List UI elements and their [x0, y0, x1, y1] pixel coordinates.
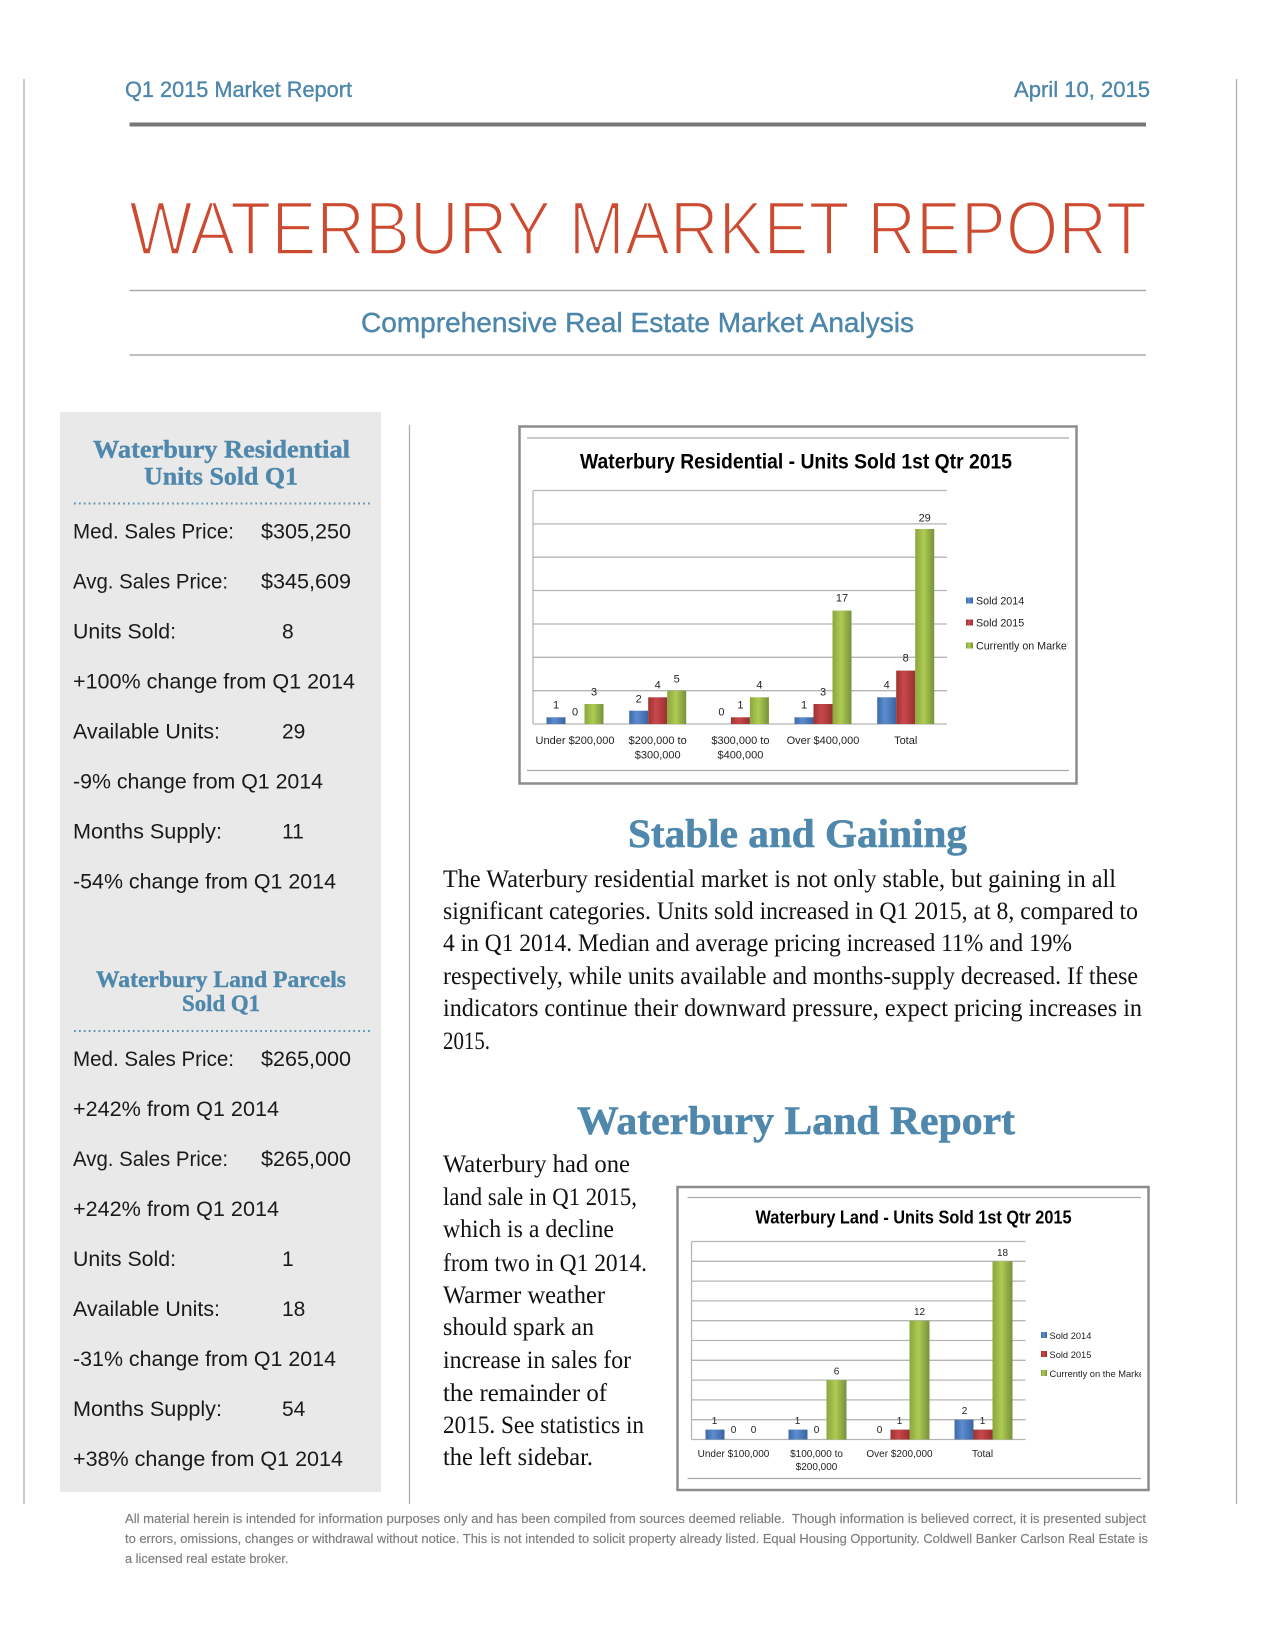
data labels: 0	[718, 706, 724, 718]
residential statistics list: 8	[282, 620, 294, 644]
header: report name: Q1 2015 Market Report	[125, 77, 352, 102]
category labels	[536, 735, 917, 762]
data labels: 3	[820, 686, 826, 698]
data labels: 0	[751, 1425, 757, 1436]
data labels: 12	[914, 1307, 925, 1318]
data labels: 1	[712, 1416, 718, 1427]
data labels: 8	[903, 652, 909, 664]
residential statistics list: 11	[282, 820, 304, 844]
legend	[1041, 1331, 1147, 1379]
data labels: 18	[997, 1248, 1008, 1259]
category labels: $200,000	[796, 1462, 838, 1473]
residential statistics list: +100% change from Q1 2014	[73, 670, 355, 694]
category labels: Over $400,000	[787, 735, 859, 747]
legend: Currently on Market	[976, 640, 1070, 652]
body text: residential market: significant categories. Units sold increased in Q1 2015, at 8, compared to	[443, 898, 1138, 925]
residential statistics list: -54% change from Q1 2014	[73, 870, 336, 894]
body text: land report: should spark an	[443, 1314, 594, 1341]
land statistics list	[73, 1048, 351, 1471]
heading: residential units sold: Units Sold Q1	[144, 464, 298, 490]
data labels: 4	[655, 680, 661, 692]
category labels: Over $200,000	[866, 1449, 933, 1460]
body text: residential market: 2015.	[443, 1028, 490, 1055]
data labels: 1	[801, 700, 807, 712]
category labels: $200,000 to	[629, 735, 687, 747]
data labels: 0	[877, 1425, 883, 1436]
data labels: 4	[756, 680, 762, 692]
category labels: Under $100,000	[698, 1449, 770, 1460]
heading: stable and gaining: Stable and Gaining	[628, 811, 967, 856]
category labels: $100,000 to	[790, 1449, 843, 1460]
category labels	[698, 1449, 993, 1473]
body text: residential market: indicators continue their downward pressure, expect pricing increases in	[443, 995, 1142, 1022]
heading: waterbury land report: Waterbury Land Report	[577, 1098, 1016, 1143]
residential statistics list: Available Units:	[73, 720, 220, 744]
land statistics list: 54	[282, 1398, 306, 1421]
legend: Currently on the Market	[1050, 1369, 1147, 1379]
category labels: Under $200,000	[536, 735, 614, 747]
body text: land report: which is a decline	[443, 1216, 614, 1243]
body text: land report: the left sidebar.	[443, 1444, 593, 1471]
legend: Sold 2014	[1050, 1331, 1091, 1341]
data labels: 4	[884, 680, 890, 692]
heading: residential units sold	[93, 436, 350, 490]
data labels	[553, 512, 931, 718]
heading: land parcels sold: Sold Q1	[182, 991, 260, 1017]
land statistics list: $265,000	[261, 1148, 351, 1171]
chart: residential units sold	[520, 426, 1076, 784]
residential statistics list	[73, 520, 355, 894]
chart title: Waterbury Residential - Units Sold 1st Qtr 2015	[580, 450, 1012, 474]
legend: Sold 2015	[976, 618, 1024, 630]
body text: land report: the remainder of	[443, 1380, 608, 1407]
body text: residential market: The Waterbury residential market is not only stable, but gaining in all	[443, 866, 1116, 893]
land statistics list: Avg. Sales Price:	[73, 1148, 228, 1171]
body text: land report: land sale in Q1 2015,	[443, 1184, 637, 1211]
category labels: Total	[972, 1449, 993, 1460]
panel: sidebar	[60, 412, 381, 1492]
category labels: $300,000 to	[711, 735, 769, 747]
residential statistics list: $305,250	[261, 520, 351, 544]
category labels: Total	[894, 735, 917, 747]
bars	[546, 529, 934, 724]
body text: land report: from two in Q1 2014.	[443, 1250, 647, 1277]
data labels: 2	[962, 1406, 968, 1417]
data labels: 6	[834, 1366, 840, 1378]
footer disclaimer: to errors, omissions, changes or withdrawal without notice. This is not intended to solicit property already listed. Equal Housing Opportunity. Coldwell Banker Carlson Real Estate is	[125, 1532, 1148, 1546]
body text: residential market: respectively, while units available and months-supply decreased. If these	[443, 963, 1138, 990]
legend: Sold 2015	[1050, 1350, 1091, 1360]
land statistics list: Units Sold:	[73, 1248, 176, 1271]
header: date: April 10, 2015	[1014, 77, 1150, 102]
land statistics list: Available Units:	[73, 1298, 220, 1321]
legend: Sold 2014	[976, 596, 1024, 608]
residential statistics list: -9% change from Q1 2014	[73, 770, 323, 794]
residential statistics list: Units Sold:	[73, 620, 176, 644]
page frame right line	[1236, 79, 1238, 1504]
bars	[706, 1261, 1012, 1440]
land statistics list: -31% change from Q1 2014	[73, 1348, 336, 1371]
residential statistics list: Med. Sales Price:	[73, 520, 234, 544]
data labels: 1	[795, 1416, 801, 1427]
data labels: 2	[636, 694, 642, 706]
data labels	[712, 1248, 1008, 1436]
page frame left line	[23, 79, 25, 1504]
body text: land report	[443, 1151, 647, 1471]
chart: land units sold	[678, 1187, 1148, 1490]
data labels: 0	[731, 1425, 737, 1436]
data labels: 5	[674, 674, 680, 686]
land statistics list: $265,000	[261, 1048, 351, 1071]
body text: land report: Warmer weather	[443, 1282, 606, 1309]
heading: residential units sold: Waterbury Residential	[93, 436, 350, 464]
residential statistics list: Avg. Sales Price:	[73, 570, 228, 594]
category labels: $400,000	[717, 750, 763, 762]
title: WATERBURY MARKET REPORT	[129, 186, 1147, 272]
body text: residential market: 4 in Q1 2014. Median and average pricing increased 11% and 19%	[443, 930, 1072, 957]
land statistics list: 1	[282, 1248, 294, 1271]
data labels: 29	[919, 512, 931, 524]
data labels: 3	[591, 686, 597, 698]
data labels: 0	[572, 706, 578, 718]
land statistics list: Months Supply:	[73, 1398, 222, 1421]
land statistics list: +242% from Q1 2014	[73, 1098, 279, 1121]
footer disclaimer	[125, 1512, 1148, 1566]
land statistics list: Med. Sales Price:	[73, 1048, 234, 1071]
data labels: 17	[836, 592, 848, 604]
legend	[966, 596, 1070, 652]
heading: land parcels sold	[96, 967, 346, 1017]
footer disclaimer: a licensed real estate broker.	[125, 1552, 288, 1566]
residential statistics list: Months Supply:	[73, 820, 222, 844]
data labels: 1	[737, 700, 743, 712]
heading: land parcels sold: Waterbury Land Parcels	[96, 967, 346, 993]
body text: land report: increase in sales for	[443, 1347, 632, 1374]
residential statistics list: $345,609	[261, 570, 351, 594]
land statistics list: 18	[282, 1298, 305, 1321]
chart title: Waterbury Land - Units Sold 1st Qtr 2015	[756, 1208, 1072, 1228]
data labels: 1	[980, 1416, 986, 1427]
subtitle: Comprehensive Real Estate Market Analysis	[361, 307, 914, 338]
body text: land report: 2015. See statistics in	[443, 1412, 644, 1439]
category labels: $300,000	[635, 750, 681, 762]
data labels: 0	[814, 1425, 820, 1436]
land statistics list: +38% change from Q1 2014	[73, 1448, 343, 1471]
data labels: 1	[897, 1416, 903, 1427]
data labels: 1	[553, 700, 559, 712]
body text: land report: Waterbury had one	[443, 1151, 630, 1178]
land statistics list: +242% from Q1 2014	[73, 1198, 279, 1221]
body text: residential market	[443, 866, 1142, 1055]
residential statistics list: 29	[282, 720, 305, 744]
footer disclaimer: All material herein is intended for information purposes only and has been compiled from sources deemed reliable. Though information is believed correct, it is presented subject	[125, 1512, 1147, 1526]
